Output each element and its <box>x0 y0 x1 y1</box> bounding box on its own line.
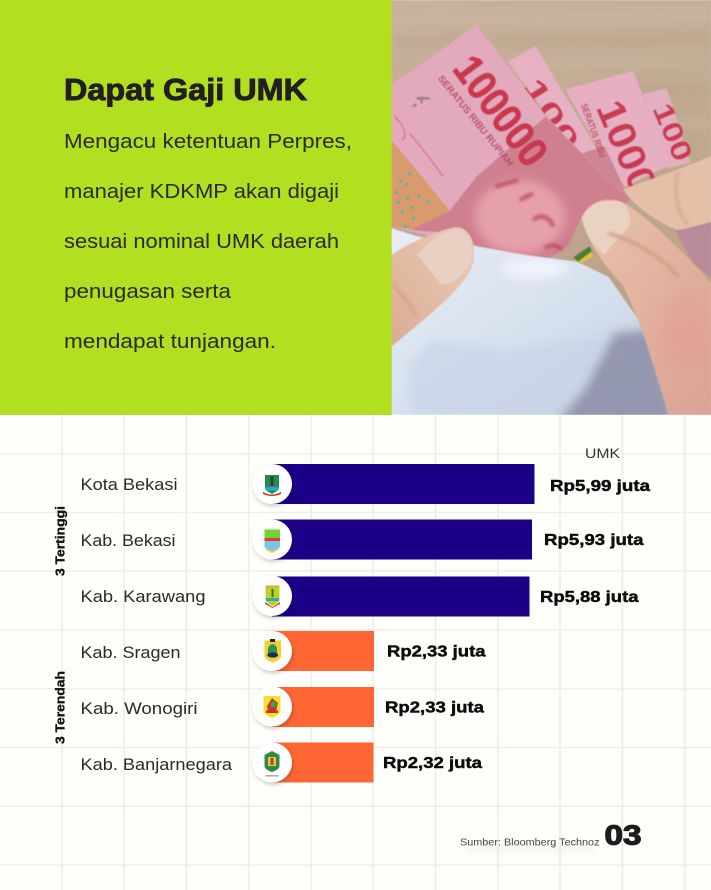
row: Kab. Wonogiri: Rp2,33 juta <box>385 700 484 716</box>
envelope <box>392 228 668 415</box>
row: Kab. Wonogiri <box>80 686 484 727</box>
row: Kab. Karawang: Rp5,88 juta <box>540 589 639 606</box>
banknote four <box>643 88 692 169</box>
column heading: UMK: UMK <box>585 445 621 461</box>
row: Kab. Banjarnegara <box>80 742 482 782</box>
icon: Kab. Banjarnegara emblem <box>264 751 280 777</box>
title: Dapat Gaji UMK <box>64 72 308 107</box>
banknote three: 1000 <box>587 94 665 200</box>
photo: hands pulling banknotes from an envelope <box>392 0 711 433</box>
intro paragraph: manajer KDKMP akan digaji <box>64 180 339 203</box>
intro paragraph: Mengacu ketentuan Perpres, <box>64 130 352 153</box>
group label: 3 Tertinggi: 3 Tertinggi <box>54 506 68 576</box>
intro paragraph: sesuai nominal UMK daerah <box>64 230 339 253</box>
source text shadow <box>465 847 595 851</box>
left thumb <box>392 227 474 347</box>
row: Kota Bekasi: Kota Bekasi <box>80 475 178 494</box>
banknote one: SERATUS RIBU RUPIAH <box>435 74 515 169</box>
icon: Kota Bekasi emblem <box>263 475 281 496</box>
right hand <box>581 156 711 415</box>
banknote three <box>566 70 668 200</box>
row: Kab. Karawang <box>80 576 639 616</box>
row: Kota Bekasi: Rp5,99 juta <box>550 478 650 495</box>
background grid <box>0 415 711 890</box>
source note: Sumber: Bloomberg Technoz <box>460 836 600 848</box>
icon: Kab. Sragen emblem <box>264 639 281 662</box>
icon: Kab. Karawang emblem <box>265 586 280 608</box>
banknote one: 100000 <box>444 46 558 175</box>
row: Kab. Sragen <box>80 631 486 671</box>
row: Kab. Sragen: Rp2,33 juta <box>387 644 486 660</box>
row: Kab. Wonogiri: Kab. Wonogiri <box>80 699 198 718</box>
row: Kota Bekasi <box>80 464 650 504</box>
intro paragraph: mendapat tunjangan. <box>64 330 276 353</box>
green security strip <box>573 246 593 263</box>
banknote two <box>508 46 596 156</box>
intro paragraph: penugasan serta <box>64 280 232 303</box>
row: Kab. Sragen: Kab. Sragen <box>80 643 180 662</box>
note strip under fingers <box>675 223 711 278</box>
banknote three: SERATUS RIBU <box>579 102 608 159</box>
row: Kab. Karawang: Kab. Karawang <box>80 587 206 606</box>
banknote four: 100 <box>646 99 699 166</box>
banknote two: 100 <box>516 72 586 156</box>
row: Kab. Bekasi: Kab. Bekasi <box>80 531 176 550</box>
icon: Kab. Wonogiri emblem <box>264 696 280 718</box>
panel: green intro <box>0 0 392 415</box>
wood table <box>392 0 711 320</box>
row: Kab. Banjarnegara: Kab. Banjarnegara <box>80 755 233 774</box>
row: Kab. Bekasi: Rp5,93 juta <box>544 532 644 549</box>
group label: 3 Terendah: 3 Terendah <box>54 671 68 744</box>
intro paragraph <box>64 130 352 353</box>
row: Kab. Bekasi <box>80 520 644 560</box>
row: Kab. Banjarnegara: Rp2,32 juta <box>383 755 482 772</box>
banknote one <box>392 25 630 258</box>
icon: Kab. Bekasi emblem <box>262 530 282 553</box>
page number: 03 <box>604 820 642 850</box>
